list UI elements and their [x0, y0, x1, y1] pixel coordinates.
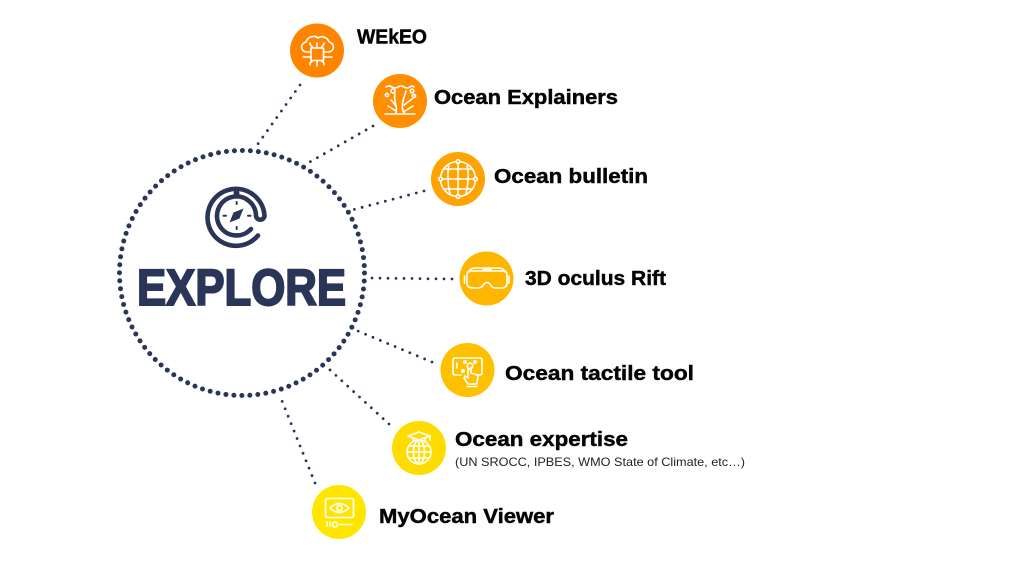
icon: globe grid — [439, 160, 477, 198]
item: MyOcean Viewer — [312, 485, 554, 539]
icon: VR headset — [464, 268, 509, 288]
icon: compass logo — [208, 189, 264, 246]
dotted main circle — [120, 150, 364, 396]
icon: coral — [385, 86, 416, 114]
label: MyOcean Viewer — [379, 505, 554, 528]
label: Ocean Explainers — [434, 86, 618, 109]
item: Ocean bulletin — [431, 152, 648, 206]
sub-label: (UN SROCC, IPBES, WMO State of Climate, etc…) — [455, 455, 745, 469]
item: Ocean Explainers — [373, 74, 618, 128]
item: Ocean expertise — [392, 421, 745, 475]
label: WEkEO — [357, 26, 427, 48]
icon: cloud chip — [302, 36, 333, 66]
item: 3D oculus Rift — [460, 252, 666, 306]
label: 3D oculus Rift — [525, 267, 666, 290]
item: Ocean tactile tool — [440, 343, 694, 397]
heading: EXPLORE: EXPLORE — [137, 259, 346, 316]
icon: video eye — [326, 498, 354, 527]
dotted connectors — [255, 85, 452, 483]
item: WEkEO — [290, 24, 427, 78]
icon: graduate globe — [407, 432, 431, 464]
label: Ocean tactile tool — [505, 362, 694, 385]
icon: touch tablet — [453, 358, 482, 386]
label: Ocean expertise — [455, 428, 628, 451]
label: Ocean bulletin — [494, 165, 648, 188]
